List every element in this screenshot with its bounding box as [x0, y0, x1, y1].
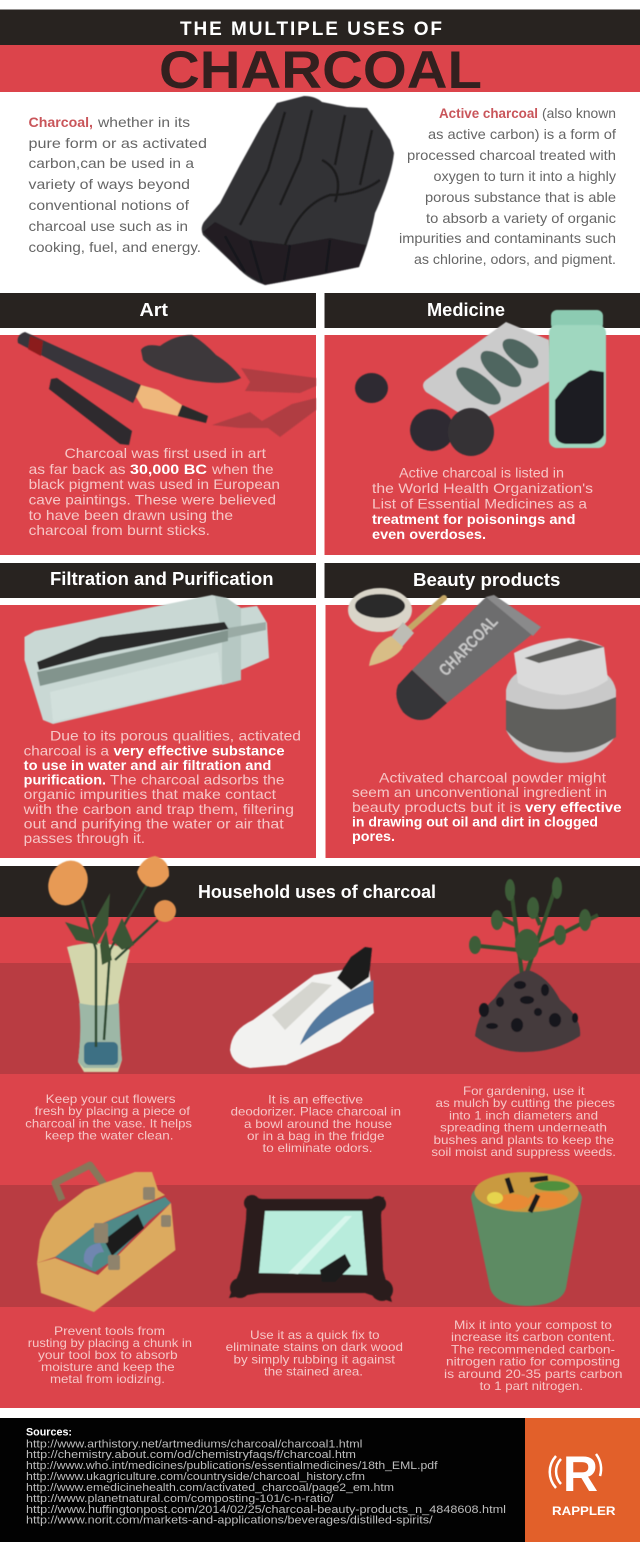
title banner [0, 10, 640, 100]
intro text: active charcoal: to absorb a variety of organic [426, 210, 616, 226]
intro text: charcoal: conventional notions of [28, 197, 189, 213]
household text 2: or in a bag in the fridge [247, 1129, 385, 1143]
footer: sources: http://www.ukagriculture.com/countryside/charcoal_history.cfm [26, 1471, 365, 1483]
beauty text: Activated charcoal powder might [379, 770, 606, 786]
household text 4: metal from iodizing. [50, 1372, 165, 1386]
icon: charcoal pencil [18, 332, 208, 423]
icon: charcoal smudges [212, 368, 316, 437]
filtration text: The charcoal adsorbs the [110, 772, 285, 788]
household text 5 [226, 1328, 403, 1378]
filtration text: with the carbon and trap them, filtering [23, 801, 294, 817]
beauty text: pores. [352, 828, 395, 844]
household text 3: bushes and plants to keep the [434, 1133, 614, 1147]
heading: filtration: Filtration and Purification [50, 569, 274, 589]
intro text: charcoal: cooking, fuel, and energy. [28, 239, 201, 255]
logo: rappler: RAPPLER [552, 1504, 616, 1518]
filtration text: Due to its porous qualities, activated [50, 728, 301, 744]
medicine text [372, 465, 593, 542]
household text 3: soil moist and suppress weeds. [431, 1145, 616, 1159]
icon: shoe with charcoal [230, 947, 374, 1068]
intro text: charcoal: pure form or as activated [28, 135, 207, 151]
icon: blister pack [423, 322, 552, 420]
medicine text: the World Health Organization's [372, 480, 593, 496]
art text: black pigment was used in European [29, 476, 280, 492]
beauty text [352, 770, 622, 844]
heading: medicine: Medicine [427, 300, 505, 320]
art text [29, 445, 280, 538]
household text 2 [231, 1092, 401, 1155]
icon: brush [369, 598, 444, 666]
household text 6: The recommended carbon- [451, 1342, 615, 1356]
intro text: active charcoal: oxygen to turn it into a highly [434, 168, 616, 184]
icon: charcoal jar [549, 310, 606, 448]
footer: sources [0, 1418, 525, 1542]
household text 2: to eliminate odors. [262, 1141, 372, 1155]
icon: powder bowl [348, 588, 412, 632]
panel: art [0, 293, 316, 555]
icon: charcoal tube [396, 595, 541, 720]
household text 6: increase its carbon content. [451, 1330, 615, 1344]
footer: sources: http://www.who.int/medicines/publications/essentialmedicines/18th_EML.pdf [26, 1460, 439, 1472]
filtration text: purification. [24, 772, 106, 788]
filtration text: out and purifying the water or air that [24, 816, 284, 832]
household text 3: into 1 inch diameters and [449, 1108, 598, 1122]
household text 6: Mix it into your compost to [454, 1318, 612, 1332]
household text 4: your tool box to absorb [38, 1348, 178, 1362]
household text 3 [431, 1084, 616, 1159]
beauty text: beauty products but it is [352, 799, 521, 815]
household text 6: nitrogen ratio for composting [446, 1354, 620, 1368]
intro text: active charcoal: (also known [542, 105, 616, 121]
icon: charcoal lump [202, 96, 394, 285]
footer: sources: Sources: [26, 1427, 72, 1439]
intro text: active charcoal: Active charcoal [439, 105, 538, 121]
icon: framed mirror with charcoal [229, 1195, 393, 1302]
intro text: charcoal: charcoal use such as in [28, 218, 188, 234]
art text: to have been drawn using the [29, 507, 233, 523]
logo: rappler: R [563, 1446, 598, 1502]
household text 4 [28, 1324, 192, 1386]
intro text: active charcoal: impurities and contaminants such [399, 230, 616, 246]
icon: flowers in vase [41, 854, 176, 1072]
heading: household: Household uses of charcoal [198, 882, 436, 902]
logo: rappler [525, 1418, 640, 1542]
icon: compost bucket [471, 1172, 582, 1306]
intro text: active charcoal: porous substance that is able [425, 189, 616, 205]
household text 5: the stained area. [264, 1364, 363, 1378]
panel: household uses of charcoal [0, 854, 640, 1408]
household text 1: Keep your cut flowers [46, 1092, 176, 1106]
filtration text: very effective substance [114, 742, 285, 758]
icon: charcoal tube: CHARCOAL [435, 612, 502, 680]
heading: art: Art [140, 300, 168, 320]
intro text: active charcoal [399, 105, 616, 267]
footer: sources: http://www.emedicinehealth.com/activated_charcoal/page2_em.htm [26, 1482, 394, 1494]
title banner: CHARCOAL [159, 41, 482, 100]
footer: sources: http://www.huffingtonpost.com/2014/02/25/charcoal-beauty-products_n_4848608.html [26, 1504, 506, 1516]
medicine text: even overdoses. [372, 526, 486, 542]
household text 3: For gardening, use it [463, 1084, 585, 1098]
intro text: active charcoal: processed charcoal treated with [407, 147, 616, 163]
household text 3: as mulch by cutting the pieces [436, 1096, 615, 1110]
medicine text: treatment for poisonings and [372, 511, 576, 527]
icon: water filter [24, 595, 269, 724]
icon: charcoal stick [49, 378, 132, 445]
household text 2: It is an effective [268, 1092, 363, 1106]
panel: medicine [324, 293, 640, 555]
art text: 30,000 BC [130, 461, 207, 477]
footer: sources: http://www.norit.com/markets-and-applications/beverages/distilled-spirits/ [26, 1514, 434, 1526]
household text 1: keep the water clean. [45, 1128, 174, 1142]
filtration text: charcoal is a [24, 742, 109, 758]
art text: cave paintings. These were believed [29, 492, 276, 508]
filtration text [23, 728, 301, 846]
icon: tool box [37, 1165, 176, 1312]
household text 5: eliminate stains on dark wood [226, 1340, 403, 1354]
footer: sources: http://www.planetnatural.com/composting-101/c-n-ratio/ [26, 1493, 335, 1505]
household text 6 [444, 1318, 622, 1393]
household text 5: by simply rubbing it against [234, 1352, 396, 1366]
household text 4: Prevent tools from [54, 1324, 165, 1338]
household text 1: fresh by placing a piece of [35, 1104, 191, 1118]
art text: charcoal from burnt sticks. [29, 522, 210, 538]
filtration text: passes through it. [24, 830, 145, 846]
intro text: active charcoal: as chlorine, odors, and pigment. [414, 251, 616, 267]
beauty text: very effective [525, 799, 622, 815]
household text 1 [25, 1092, 192, 1142]
household text 3: spreading them underneath [440, 1120, 607, 1134]
intro text: charcoal: variety of ways beyond [28, 176, 190, 192]
filtration text: to use in water and air filtration and [24, 757, 271, 773]
panel: filtration and purification [0, 563, 316, 858]
heading: beauty products: Beauty products [413, 570, 560, 590]
household text 4: rusting by placing a chunk in [28, 1336, 192, 1350]
intro text: active charcoal: as active carbon) is a form of [428, 126, 616, 142]
icon: charcoal powder [141, 335, 241, 383]
panel: beauty products [324, 563, 640, 858]
intro text: charcoal: whether in its [97, 114, 190, 130]
household text 5: Use it as a quick fix to [250, 1328, 380, 1342]
household text 6: is around 20-35 parts carbon [444, 1367, 622, 1381]
beauty text: seem an unconventional ingredient in [352, 784, 607, 800]
intro text: charcoal [28, 114, 207, 255]
filtration text: organic impurities that make contact [24, 786, 276, 802]
household text 4: moisture and keep the [41, 1360, 175, 1374]
household text 1: charcoal in the vase. It helps [25, 1116, 192, 1130]
beauty text: in drawing out oil and dirt in clogged [352, 813, 598, 829]
medicine text: List of Essential Medicines as a [372, 496, 587, 512]
icon: tablets [355, 373, 494, 456]
icon: plant with charcoal soil [469, 877, 598, 1052]
art text: as far back as [29, 461, 126, 477]
household text 2: deodorizer. Place charcoal in [231, 1105, 401, 1119]
art text: when the [211, 461, 274, 477]
intro text: charcoal: carbon,can be used in a [28, 155, 194, 171]
household text 2: a bowl around the house [244, 1117, 392, 1131]
intro text: charcoal: Charcoal, [28, 114, 93, 130]
household text 6: to 1 part nitrogen. [480, 1379, 583, 1393]
icon: cosmetic jar [506, 638, 616, 763]
art text: Charcoal was first used in art [64, 445, 266, 461]
footer: sources: http://www.arthistory.net/artmediums/charcoal/charcoal1.html [26, 1438, 362, 1450]
title banner: THE MULTIPLE USES OF [180, 19, 442, 40]
footer: sources: http://chemistry.about.com/od/chemistryfaqs/f/charcoal.htm [26, 1449, 356, 1461]
medicine text: Active charcoal is listed in [399, 465, 564, 481]
